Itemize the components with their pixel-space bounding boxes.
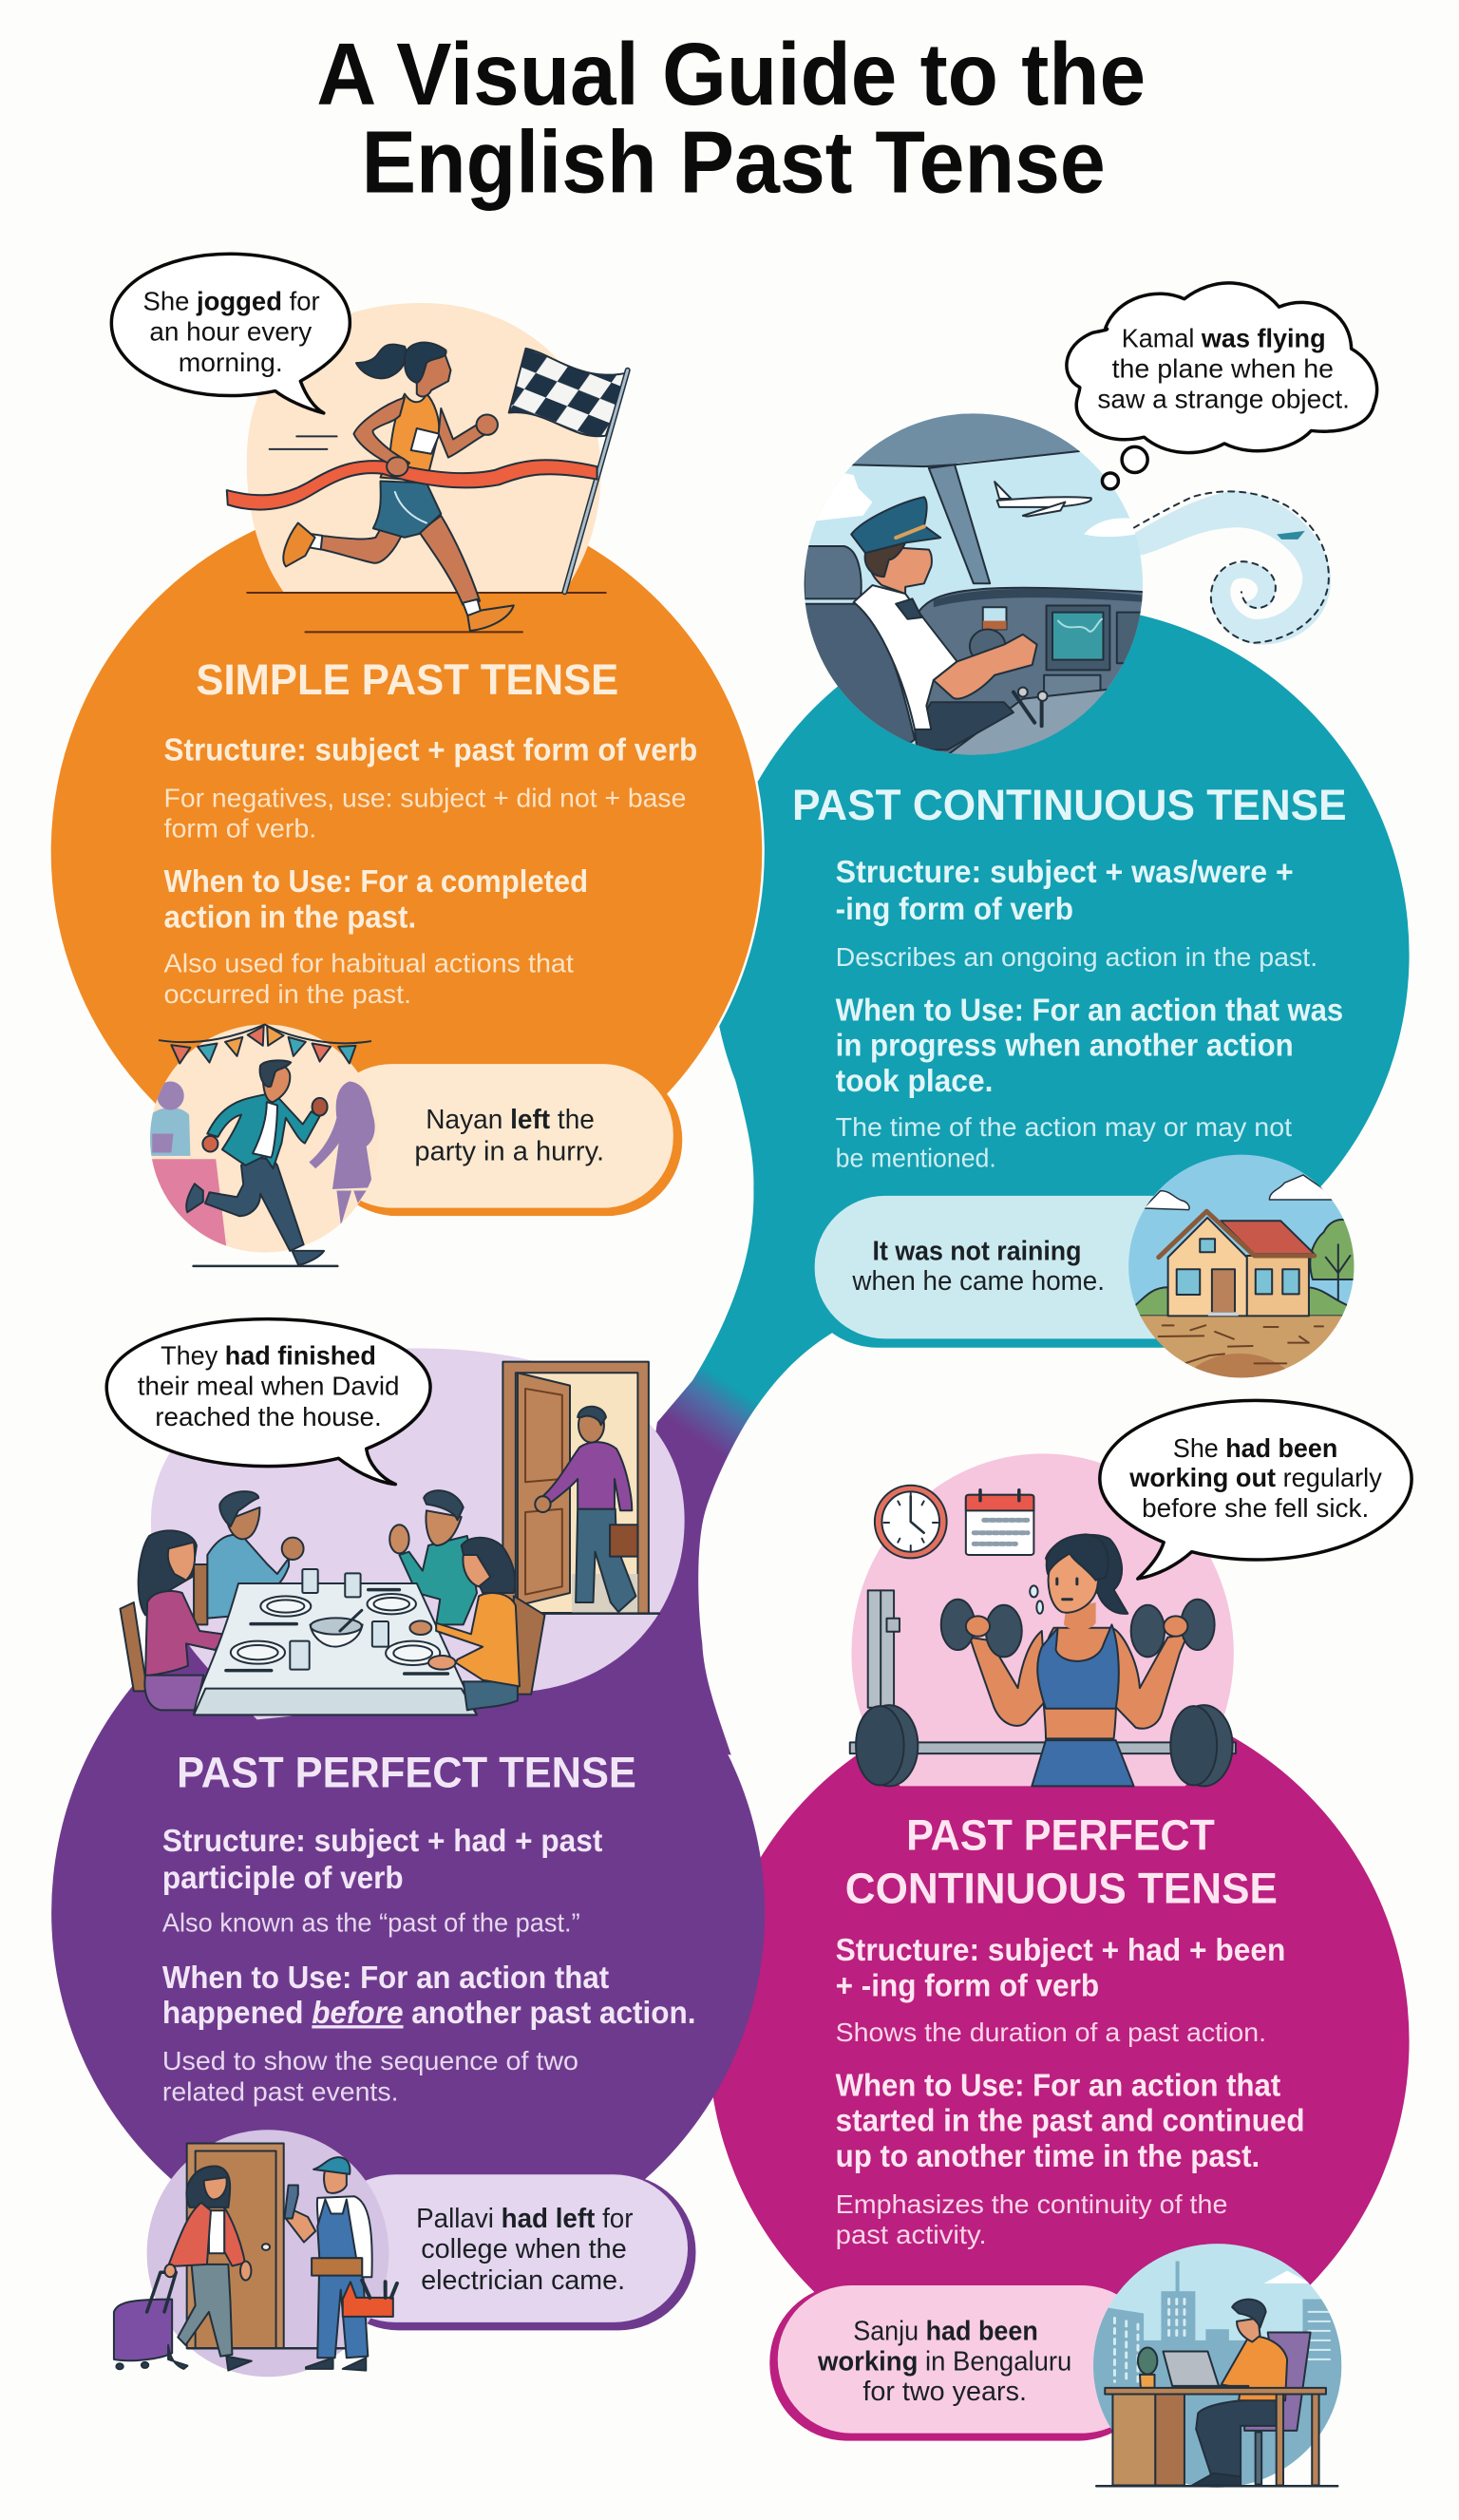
- text block: structure: Describes an ongoing action in the past.: [836, 942, 1317, 972]
- illustration: flight path swirl: [1023, 490, 1331, 645]
- speech bubble: She had been: [1173, 1433, 1337, 1463]
- icon: clock: [875, 1486, 947, 1558]
- thought bubble: the plane when he: [1112, 354, 1334, 384]
- text block: when to use: up to another time in the past.: [836, 2138, 1260, 2173]
- text block: when to use: [164, 863, 588, 1009]
- text block: structure: Shows the duration of a past action.: [836, 2018, 1266, 2047]
- text block: structure: Also known as the “past of the past.”: [162, 1908, 580, 1938]
- text block: structure: participle of verb: [162, 1860, 404, 1895]
- text block: when to use: [836, 2067, 1305, 2249]
- text block: when to use: past activity.: [836, 2220, 987, 2249]
- example pill: Sanju had been: [853, 2316, 1038, 2347]
- text block: structure: [162, 1823, 602, 1938]
- speech bubble: morning.: [179, 348, 283, 377]
- text block: when to use: When to Use: For an action that was: [836, 992, 1343, 1027]
- text block: when to use: When to Use: For an action that: [836, 2067, 1280, 2102]
- illustration: lilac backdrop: [151, 1349, 685, 1719]
- speech bubble: reached the house.: [155, 1402, 382, 1431]
- heading: PAST CONTINUOUS TENSE: [792, 781, 1347, 829]
- example pill: party in a hurry.: [414, 1137, 604, 1167]
- heading: [845, 1810, 1278, 1912]
- title: English Past Tense: [362, 112, 1106, 211]
- example pill: It was not raining: [873, 1236, 1081, 1267]
- text block: structure: For negatives, use: subject + did not + base: [164, 783, 686, 812]
- example pill: [321, 2174, 695, 2330]
- text block: when to use: started in the past and continued: [836, 2103, 1305, 2138]
- example pill: for two years.: [862, 2377, 1027, 2407]
- illustration: man at desk: [1093, 2242, 1341, 2490]
- thought bubble: Kamal was flying: [1122, 323, 1326, 352]
- speech bubble: working out regularly: [1128, 1463, 1382, 1492]
- text block: structure: + -ing form of verb: [836, 1967, 1099, 2002]
- text block: when to use: happened before another past action.: [162, 1995, 695, 2030]
- text block: structure: [836, 1932, 1285, 2047]
- example pill: Nayan left the: [426, 1105, 595, 1135]
- text block: structure: Structure: subject + had + past: [162, 1823, 602, 1858]
- thought bubble: saw a strange object.: [1097, 385, 1350, 414]
- panel: past perfect continuous tense: [709, 1400, 1412, 2490]
- panel: past continuous tense: [711, 283, 1410, 1381]
- text block: when to use: related past events.: [162, 2076, 399, 2106]
- text block: when to use: [162, 1960, 695, 2106]
- illustration: man leaving party: [138, 1025, 379, 1266]
- text block: when to use: When to Use: For an action that: [162, 1960, 609, 1995]
- illustration: family dinner and David arriving: [121, 1362, 659, 1715]
- example pill: [321, 1064, 682, 1216]
- heading: SIMPLE PAST TENSE: [196, 655, 618, 704]
- text block: when to use: The time of the action may or may not: [836, 1112, 1292, 1142]
- example pill: college when the: [421, 2234, 627, 2264]
- text block: when to use: took place.: [836, 1063, 993, 1098]
- thought bubble: [1067, 283, 1377, 489]
- text block: when to use: action in the past.: [164, 899, 416, 934]
- text block: when to use: [836, 992, 1343, 1172]
- example pill: [800, 1189, 1242, 1348]
- text block: structure: -ing form of verb: [836, 891, 1073, 926]
- text block: when to use: Used to show the sequence of two: [162, 2046, 578, 2075]
- speech bubble: They had finished: [161, 1340, 376, 1370]
- speech bubble: [111, 254, 350, 413]
- illustration: house: [1125, 1153, 1357, 1381]
- text block: when to use: Also used for habitual actions that: [164, 949, 574, 978]
- text block: structure: form of verb.: [164, 814, 316, 843]
- speech bubble: She jogged for: [143, 287, 320, 316]
- illustration: pilot in cockpit: [802, 410, 1149, 760]
- text block: when to use: When to Use: For a completed: [164, 863, 588, 899]
- text block: when to use: occurred in the past.: [164, 979, 411, 1009]
- icon: calendar: [966, 1490, 1033, 1555]
- title: A Visual Guide to the: [316, 25, 1146, 123]
- heading: PAST PERFECT TENSE: [177, 1748, 636, 1796]
- text block: structure: Structure: subject + was/were +: [836, 854, 1294, 889]
- illustration: Pallavi leaving and electrician arriving: [114, 2130, 397, 2377]
- text block: structure: Structure: subject + had + been: [836, 1932, 1285, 1967]
- text block: structure: [836, 854, 1317, 972]
- example pill: when he came home.: [851, 1266, 1105, 1297]
- illustration: runner at finish line: [227, 303, 628, 632]
- example pill: working in Bengaluru: [817, 2347, 1071, 2378]
- example pill: [769, 2284, 1155, 2441]
- text block: when to use: be mentioned.: [836, 1143, 996, 1172]
- text block: structure: Structure: subject + past form of verb: [164, 731, 697, 767]
- speech bubble: an hour every: [149, 317, 312, 347]
- speech bubble: [106, 1319, 430, 1485]
- heading: PAST PERFECT: [906, 1810, 1215, 1859]
- example pill: electrician came.: [421, 2265, 625, 2296]
- example pill: Pallavi had left for: [416, 2204, 634, 2234]
- panel: past perfect tense: [51, 1319, 765, 2377]
- heading: CONTINUOUS TENSE: [845, 1864, 1278, 1912]
- text block: when to use: in progress when another action: [836, 1028, 1294, 1063]
- illustration: woman lifting weights: [849, 1453, 1237, 1788]
- text block: structure: [164, 731, 697, 843]
- speech bubble: [1100, 1400, 1412, 1579]
- connector between teal and purple panels: [611, 996, 964, 1755]
- speech bubble: their meal when David: [138, 1372, 400, 1401]
- panel: simple past tense: [49, 254, 764, 1266]
- text block: when to use: Emphasizes the continuity of the: [836, 2189, 1227, 2219]
- speech bubble: before she fell sick.: [1142, 1493, 1369, 1523]
- title: [316, 25, 1146, 211]
